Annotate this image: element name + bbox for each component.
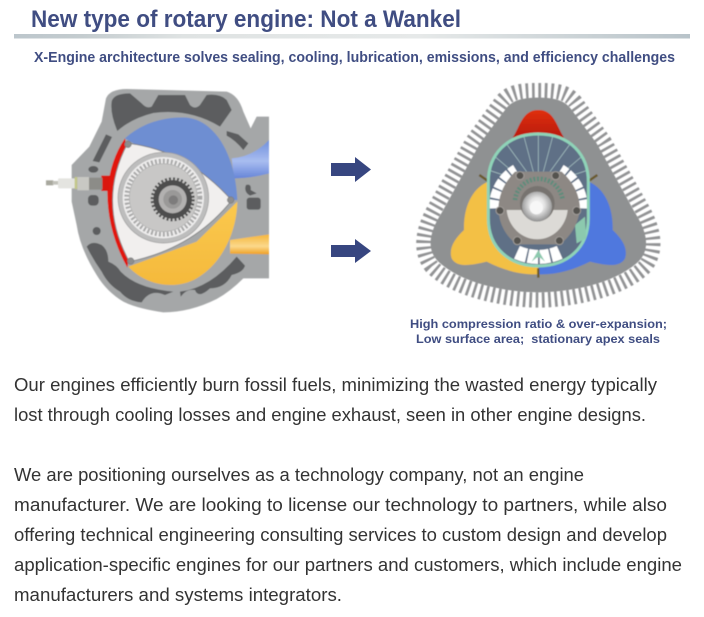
paragraph 2: We are positioning ourselves as a technology company, not an engine: [14, 465, 584, 485]
paragraph 2: application-specific engines for our partners and customers, which include engine: [14, 555, 682, 575]
paragraph 1: Our engines efficiently burn fossil fuels, minimizing the wasted energy typically: [14, 375, 657, 395]
triangular rotor: [113, 143, 232, 262]
brown pins: [479, 175, 597, 278]
eccentric shaft gear: [152, 179, 193, 220]
paragraph 2: manufacturers and systems integrators.: [14, 585, 342, 605]
radial ribs: [490, 135, 586, 175]
caption: Low surface area; stationary apex seals: [416, 332, 660, 346]
spark plug: [46, 177, 102, 190]
engine body: [431, 98, 646, 292]
diagram: Wankel engine cross-section: [46, 89, 269, 312]
title: New type of rotary engine: Not a Wankel: [31, 6, 461, 33]
chamber lobe: red: [513, 110, 564, 138]
engine housing: [72, 89, 269, 312]
ring gear teeth: [515, 179, 563, 200]
subtitle: X-Engine architecture solves sealing, cooling, lubrication, emissions, and efficiency challenges: [34, 50, 675, 66]
eccentric counterweight: [507, 210, 568, 239]
caption: [410, 317, 667, 346]
exhaust chamber (yellow): [128, 202, 237, 285]
white windows: [496, 171, 581, 257]
divider rule: [14, 34, 690, 38]
paragraph 1: lost through cooling losses and engine exhaust, seen in other engine designs.: [14, 405, 646, 425]
exhaust port: [230, 234, 269, 254]
intake port: [232, 140, 269, 178]
diagram: X-Engine cross-section: [424, 91, 653, 300]
green side web: [575, 217, 586, 243]
caption: High compression ratio & over-expansion;: [410, 317, 667, 331]
paragraph 2: manufacturer. We are looking to license our technology to partners, while also: [14, 495, 667, 515]
rotor housing oval: [488, 134, 588, 266]
paragraph 2: offering technical engineering consulting services to custom design and develop: [14, 525, 667, 545]
cooling fins: [424, 91, 653, 300]
apex seals: [125, 141, 234, 264]
central shaft: [520, 186, 555, 222]
hub bolts: [496, 172, 581, 245]
chamber lobe: yellow: [451, 182, 538, 274]
arrow: bottom: [331, 239, 371, 263]
combustion chamber (red): [107, 138, 137, 268]
paragraph 1: [14, 375, 657, 425]
paragraph 2: [14, 465, 682, 605]
housing coolant cavities: [87, 93, 261, 302]
hub plate: [498, 172, 580, 244]
internal ring gear: [118, 152, 209, 243]
intake chamber (blue): [125, 118, 237, 200]
chamber lobe: blue: [538, 182, 626, 274]
green bottom web: [532, 250, 545, 262]
arrow: top: [331, 157, 371, 182]
